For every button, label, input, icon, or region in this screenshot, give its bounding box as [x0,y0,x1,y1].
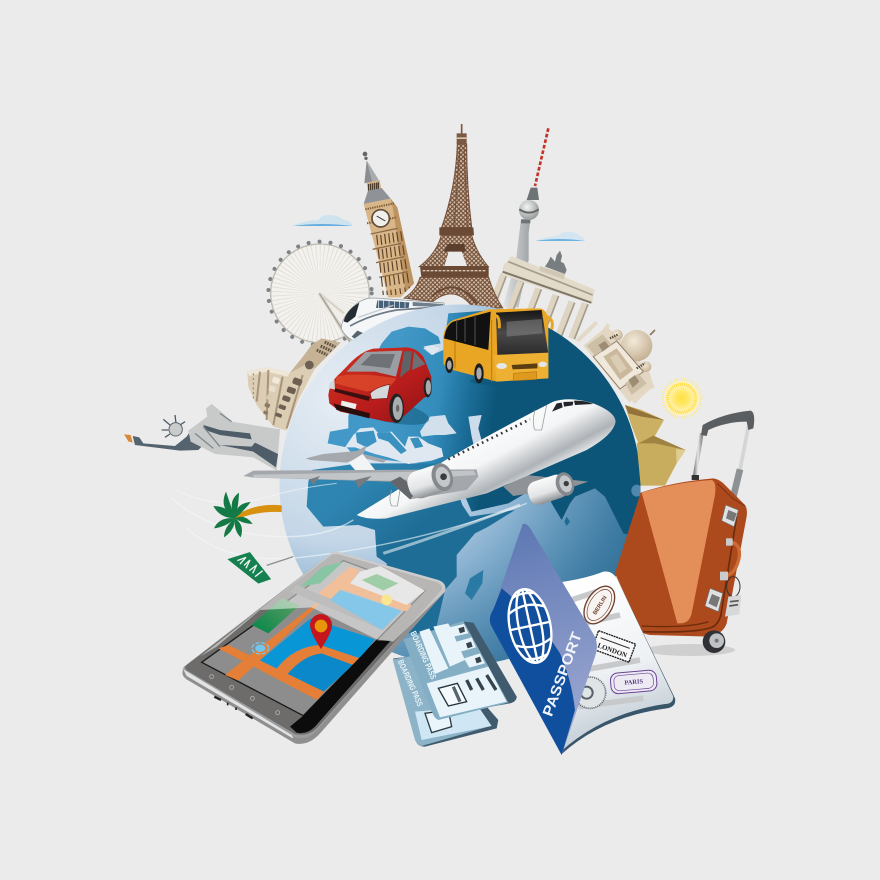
wheel [703,630,725,653]
Madagascar [465,570,483,600]
stamp: Berlin [578,581,621,629]
stamp: Berlin: BERLIN [592,595,609,616]
stamp: round [574,677,606,708]
landmark: London Eye [268,242,372,345]
cover [490,524,597,755]
Caspian [468,415,482,444]
cloud right [535,232,585,241]
cloud left [293,215,353,226]
back pass: BOARDING PASS [396,658,425,708]
Black Sea [420,415,457,437]
inner page [562,571,675,754]
suitcase [615,411,754,653]
stamp: Paris [610,670,658,694]
stamp: London [592,631,636,662]
boarding passes [393,621,517,747]
Italy and Greece [377,432,423,454]
gloss [200,552,445,657]
car [328,347,432,423]
palm tree [213,492,282,537]
front pass: BOARDING PASS [409,629,439,681]
landmark: Taj Mahal [577,322,655,402]
corner brackets [705,505,738,612]
bus [443,308,552,383]
Mediterranean [345,427,443,464]
White Sea [423,345,440,355]
landmark: pedestal and Statue of Liberty [124,404,280,471]
landmark: pyramids [625,405,686,486]
near wing [243,469,478,499]
tablet [182,552,445,744]
Sri Lanka [564,517,570,526]
fuselage [357,399,616,519]
sun [662,379,701,418]
body [615,478,747,637]
landmark: Eiffel Tower [404,124,503,308]
passport [490,524,675,755]
passport globe [502,585,558,667]
globe [280,304,652,666]
train [341,298,445,342]
landmark: Berlin TV tower [503,128,548,307]
tag [725,577,741,617]
landmark: Colosseum [247,338,341,431]
far wing [503,475,588,496]
stamp: London: LONDON [597,642,628,660]
air streaks [172,483,527,559]
France and central Europe [356,431,377,447]
continents [307,310,652,633]
tail [306,446,387,470]
side grip [720,538,739,580]
bus shadow [470,376,550,386]
near engine [404,460,457,502]
car shadow [345,392,431,430]
buttons [210,675,280,718]
passport title: PASSPORT [540,630,586,719]
airplane [243,399,616,519]
road sign [227,552,293,584]
east Asia sea blob [631,485,642,497]
handle [692,411,754,497]
suitcase shadow [645,644,735,656]
far engine [525,470,577,507]
map [218,562,425,700]
black lower-right bezel [290,641,391,733]
stamp: Paris: PARIS [624,678,644,687]
landmark: Brandenburg Gate [488,251,595,339]
map pin [310,614,332,649]
landmark: Big Ben [363,152,414,297]
